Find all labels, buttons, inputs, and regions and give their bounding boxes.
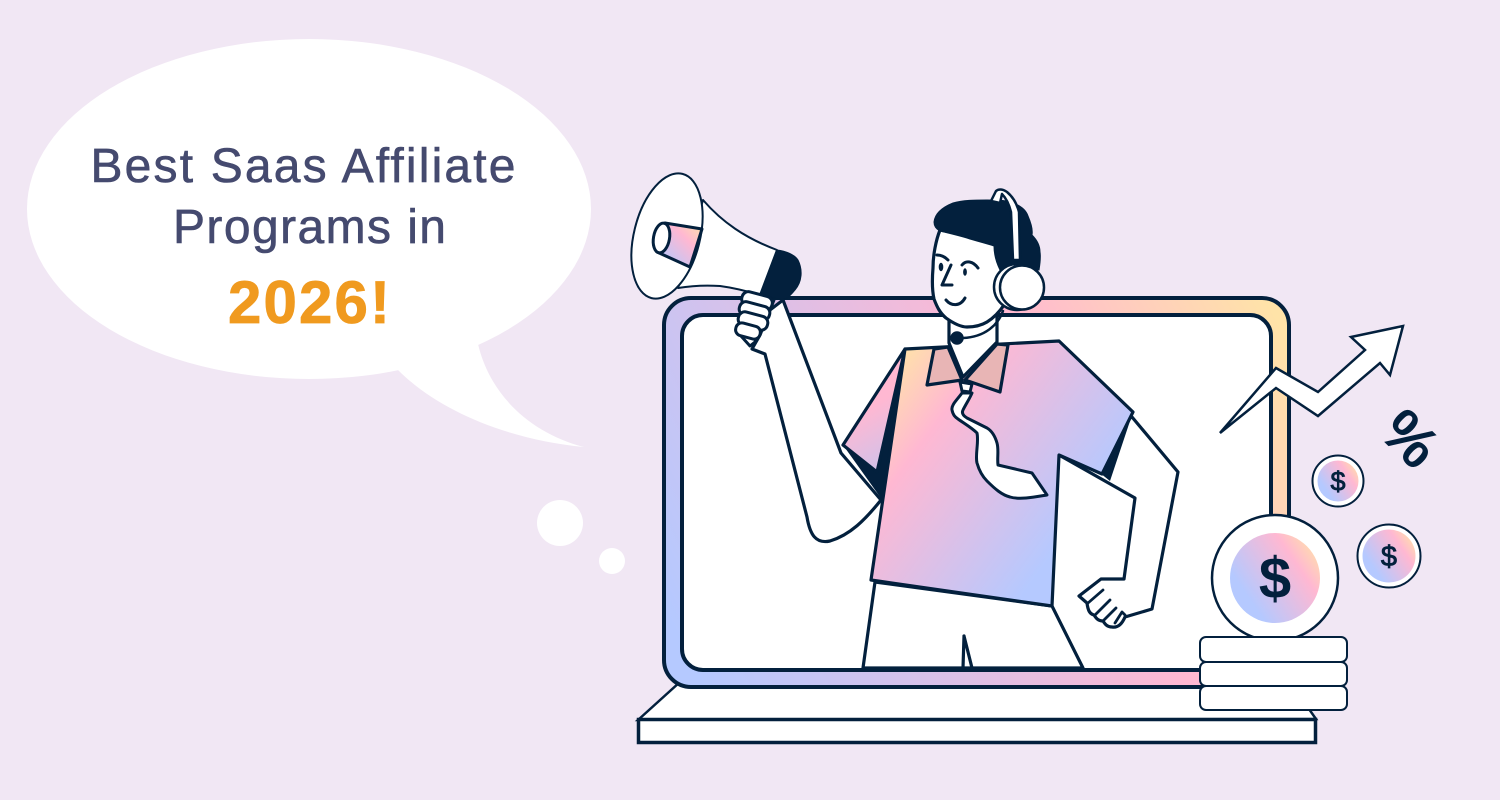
title: Best Saas Affiliate [90,140,516,193]
title: 2026! [228,269,390,336]
collar [927,344,1008,392]
headset [952,189,1044,344]
coin: small: $ [1330,466,1346,496]
coin: medium: $ [1381,541,1397,573]
left arm raised [752,300,881,542]
laptop base [638,682,1316,742]
coin: large: $ [1259,546,1291,611]
face [932,230,1010,327]
tie [952,382,1047,498]
title [90,140,516,336]
eyes, nose, smile [937,255,978,305]
hair [934,200,1040,270]
speech bubble [27,39,591,447]
right arm [1059,417,1178,627]
neck [949,312,997,377]
laptop screen [664,298,1289,687]
percent sign: % [1368,396,1453,481]
shirt sleeve [843,349,905,472]
coin: small [1312,456,1364,506]
coin stack [1200,637,1347,710]
thought dots [537,500,625,574]
growth arrow [1220,326,1403,433]
figure [734,189,1178,668]
right hand fingers [1088,590,1125,623]
coin: large [1212,515,1338,641]
shirt sleeve wedges [843,350,1133,501]
megaphone [619,166,801,306]
left hand on megaphone [734,290,774,346]
title: Programs in [173,201,446,254]
pants [863,582,1083,668]
coin: medium [1358,524,1420,588]
shirt body [871,341,1133,606]
